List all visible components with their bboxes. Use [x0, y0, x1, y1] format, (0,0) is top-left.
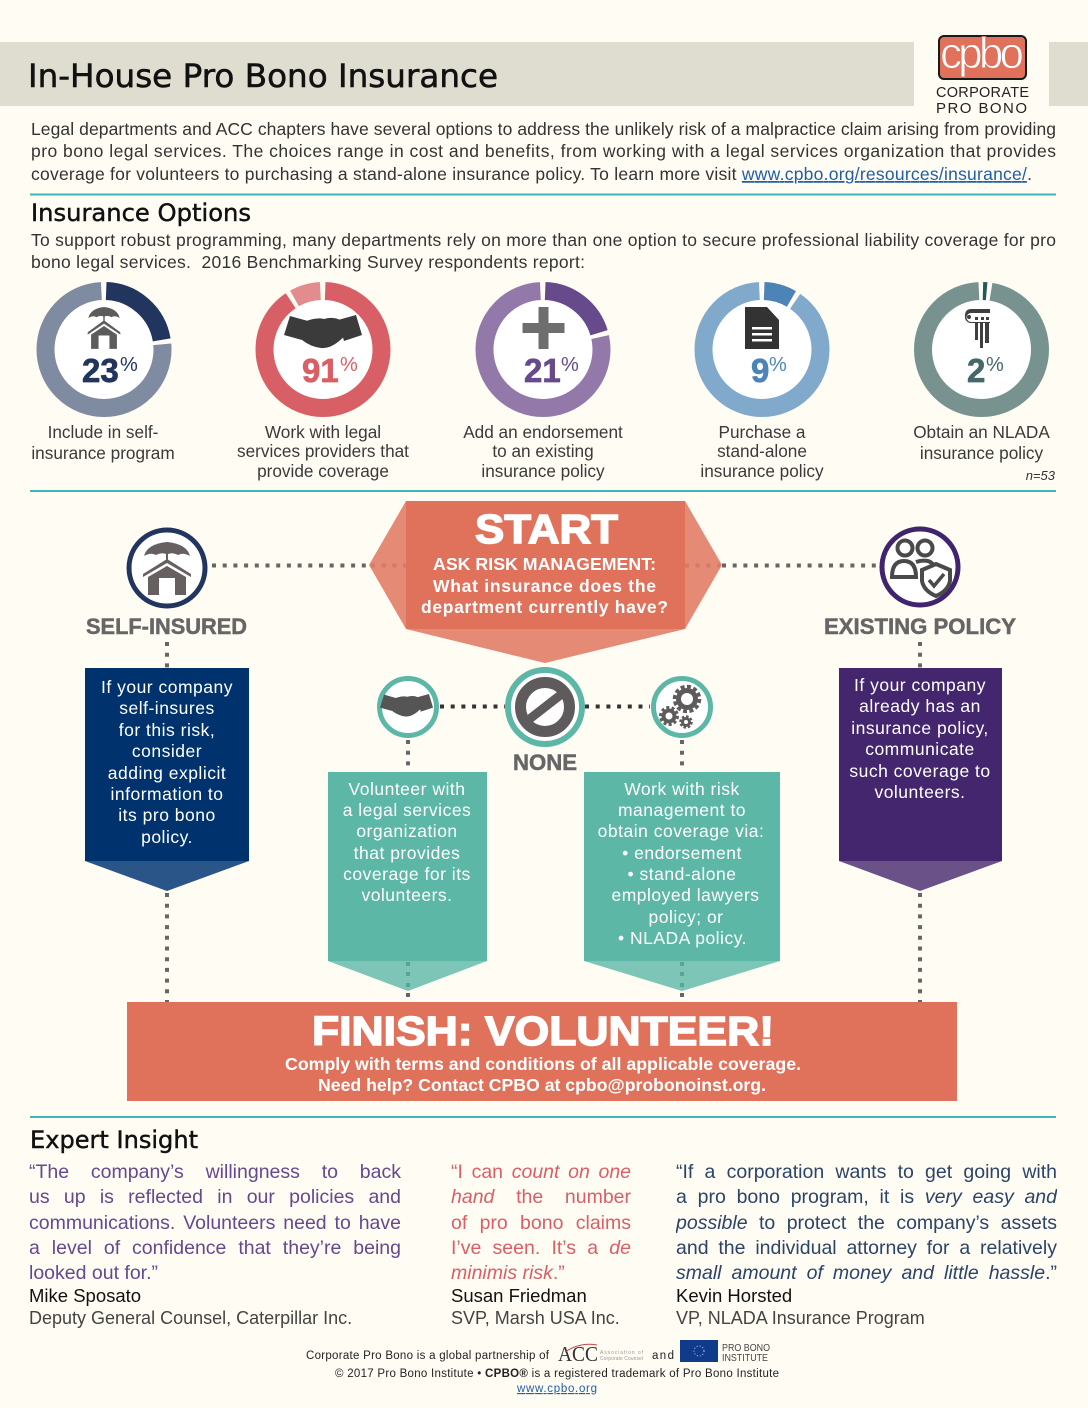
logo: ACC: ACC: [558, 1342, 598, 1366]
attribution: Mike Sposato: [29, 1285, 352, 1328]
heading: Insurance Options: Insurance Options: [31, 199, 251, 227]
attribution: Kevin Horsted: [676, 1285, 925, 1328]
panel: self-insured advice: self-insures: [119, 698, 215, 718]
donut: 23% self-insurance: [31, 291, 175, 463]
quote: Susan Friedman: of pro bono claims: [451, 1212, 631, 1234]
logo: Pro Bono Institute: PRO BONO: [722, 1343, 770, 1354]
title: In-House Pro Bono Insurance: [28, 57, 498, 95]
self-insured node: SELF-INSURED: [86, 614, 247, 639]
quote: Kevin Horsted: possible to protect the company’s assets: [676, 1212, 1057, 1234]
donut: 2% NLADA policy: insurance policy: [920, 443, 1044, 463]
footer: © 2017 Pro Bono Institute • CPBO® is a registered trademark of Pro Bono Institute: [335, 1368, 779, 1380]
quote: Susan Friedman: hand the number: [451, 1186, 631, 1208]
donut: 91% legal services providers: services providers that: [237, 441, 409, 461]
header band: [0, 42, 1088, 106]
quote: Susan Friedman: minimis risk.”: [451, 1262, 565, 1284]
intro paragraph: Legal departments and ACC chapters have several options to address the unlikely risk of a malpractice claim arising from providing: [31, 119, 1056, 139]
panel: existing policy advice: volunteers.: [874, 782, 966, 802]
panel: volunteer with legal services organization: [328, 772, 487, 997]
logo: Pro Bono Institute: INSTITUTE: [722, 1353, 768, 1364]
logo: Corporate Pro Bono: PRO BONO: [936, 100, 1027, 117]
donut: 9% stand-alone policy: %: [769, 354, 787, 376]
attribution: Susan Friedman: [451, 1285, 620, 1328]
panel: volunteer with legal services organization: a legal services: [343, 800, 471, 820]
donut: 9% stand-alone policy: 9: [751, 352, 769, 389]
quote: Kevin Horsted: “If a corporation wants to get going with: [676, 1161, 1057, 1183]
quote: Mike Sposato: “The company’s willingness to back: [29, 1161, 401, 1183]
donut: 9% stand-alone policy: stand-alone: [717, 441, 807, 461]
panel: volunteer with legal services organization: coverage for its: [343, 864, 471, 884]
quote: Kevin Horsted: a pro bono program, it is very easy and: [676, 1186, 1057, 1208]
panel: existing policy advice: [839, 668, 1002, 891]
donut: 21% endorsement: Add an endorsement: [463, 422, 623, 442]
attribution: Susan Friedman: Susan Friedman: [451, 1285, 587, 1306]
donut: 23% self-insurance: 23: [82, 352, 119, 389]
panel: self-insured advice: information to: [110, 784, 224, 804]
sample size note: n=53: [1026, 468, 1056, 483]
logo: Corporate Pro Bono: CORPORATE: [936, 85, 1029, 101]
panel: work with risk management: [584, 772, 780, 997]
icon: gears node: [654, 678, 710, 736]
panel: existing policy advice: such coverage to: [849, 761, 991, 781]
donut: 21% endorsement: [463, 291, 623, 481]
quote: Mike Sposato: a level of confidence that they’re being: [29, 1237, 401, 1259]
start banner: What insurance does the: [433, 576, 656, 596]
panel: work with risk management: management to: [618, 800, 746, 820]
self-insured node: [86, 530, 247, 639]
logo: Corporate Pro Bono: cpbo: [940, 29, 1024, 78]
donut: 91% legal services providers: %: [340, 354, 358, 376]
quote: Kevin Horsted: small amount of money and little hassle.”: [676, 1262, 1057, 1284]
existing policy node: [824, 529, 1016, 639]
attribution: Kevin Horsted: Kevin Horsted: [676, 1285, 792, 1306]
insurance options intro text: bono legal services. 2016 Benchmarking Survey respondents report:: [31, 252, 585, 272]
donut: 2% NLADA policy: Obtain an NLADA: [913, 422, 1050, 442]
panel: volunteer with legal services organization: Volunteer with: [349, 779, 465, 799]
intro paragraph: pro bono legal services. The choices range in cost and benefits, from working with a legal services organization that provides: [31, 141, 1056, 161]
quote: Mike Sposato: looked out for.”: [29, 1262, 158, 1284]
panel: existing policy advice: insurance policy,: [851, 718, 989, 738]
donut: 21% endorsement: 21: [524, 352, 561, 389]
panel: self-insured advice: its pro bono: [118, 805, 216, 825]
logo: Pro Bono Institute: [680, 1340, 770, 1364]
start banner: ASK RISK MANAGEMENT:: [433, 554, 656, 574]
donut: 91% legal services providers: [237, 291, 409, 481]
panel: existing policy advice: If your company: [854, 675, 986, 695]
panel: work with risk management: obtain coverage via:: [598, 821, 764, 841]
attribution: Mike Sposato: Mike Sposato: [29, 1285, 141, 1306]
quote: Susan Friedman: “I can count on one: [451, 1161, 631, 1183]
quote: Susan Friedman: I’ve seen. It’s a de: [451, 1237, 631, 1259]
panel: self-insured advice: policy.: [141, 827, 193, 847]
insurance options intro text: To support robust programming, many departments rely on more than one option to secure professional liability coverage for pro: [31, 230, 1056, 250]
footer: [306, 1350, 779, 1395]
footer: www.cpbo.org: [516, 1383, 597, 1395]
donut: 2% NLADA policy: [913, 291, 1050, 463]
finish banner: Need help? Contact CPBO at cpbo@probonoinst.org.: [318, 1075, 766, 1095]
icon: handshake node: [380, 678, 436, 736]
donut: 21% endorsement: insurance policy: [481, 461, 605, 481]
attribution: Mike Sposato: Deputy General Counsel, Caterpillar Inc.: [29, 1308, 352, 1328]
panel: existing policy advice: already has an: [859, 696, 981, 716]
start banner: START: [475, 506, 618, 552]
donut: 2% NLADA policy: 2: [967, 352, 985, 389]
panel: work with risk management: employed lawyers: [611, 885, 760, 905]
donut: 23% self-insurance: Include in self-: [48, 422, 158, 442]
attribution: Kevin Horsted: VP, NLADA Insurance Program: [676, 1308, 925, 1328]
quote: Susan Friedman: [451, 1161, 631, 1284]
quote: Mike Sposato: [29, 1161, 401, 1284]
quote: Kevin Horsted: [676, 1161, 1057, 1284]
donut: 91% legal services providers: provide coverage: [257, 461, 389, 481]
panel: volunteer with legal services organization: that provides: [354, 843, 460, 863]
panel: self-insured advice: [85, 668, 249, 891]
donut: 2% NLADA policy: %: [986, 354, 1004, 376]
logo: Corporate Pro Bono: [936, 29, 1029, 117]
start banner: department currently have?: [421, 597, 668, 617]
donut: 23% self-insurance: insurance program: [31, 443, 175, 463]
attribution: Susan Friedman: SVP, Marsh USA Inc.: [451, 1308, 620, 1328]
heading: Expert Insight: Expert Insight: [30, 1126, 198, 1154]
donut: 21% endorsement: to an existing: [492, 441, 594, 461]
quote: Kevin Horsted: and the individual attorney for a relatively: [676, 1237, 1057, 1259]
panel: volunteer with legal services organization: organization: [356, 821, 458, 841]
donut: 9% stand-alone policy: insurance policy: [700, 461, 824, 481]
panel: work with risk management: • stand-alone: [628, 864, 736, 884]
insurance options intro text: [31, 230, 1056, 272]
start banner: [369, 501, 722, 663]
logo: ACC: Association of: [600, 1350, 644, 1356]
logo: ACC: Corporate Counsel: [600, 1356, 643, 1362]
logo: ACC: [558, 1342, 644, 1366]
donut: 21% endorsement: %: [561, 354, 579, 376]
donut: 9% stand-alone policy: [700, 291, 824, 481]
donut: 91% legal services providers: 91: [302, 352, 339, 389]
footer: Corporate Pro Bono is a global partnership of: [306, 1350, 550, 1362]
donut: 23% self-insurance: %: [120, 354, 138, 376]
finish banner: Comply with terms and conditions of all applicable coverage.: [285, 1054, 801, 1074]
panel: work with risk management: policy; or: [648, 907, 724, 927]
panel: existing policy advice: communicate: [865, 739, 975, 759]
finish banner: FINISH: VOLUNTEER!: [312, 1008, 774, 1054]
intro paragraph: coverage for volunteers to purchasing a stand-alone insurance policy. To learn more visit www.cpbo.org/resources/insurance/.: [31, 164, 1032, 184]
existing policy node: EXISTING POLICY: [824, 614, 1016, 639]
panel: work with risk management: • NLADA policy.: [618, 928, 747, 948]
quote: Mike Sposato: us up is reflected in our policies and: [29, 1186, 401, 1208]
panel: work with risk management: • endorsement: [622, 843, 742, 863]
panel: self-insured advice: consider: [132, 741, 202, 761]
footer: and: [652, 1350, 674, 1362]
finish banner: [127, 1002, 957, 1101]
panel: volunteer with legal services organization: volunteers.: [361, 885, 453, 905]
quote: Mike Sposato: communications. Volunteers need to have: [29, 1212, 401, 1234]
panel: work with risk management: Work with risk: [624, 779, 740, 799]
donut: 9% stand-alone policy: Purchase a: [719, 422, 806, 442]
connectors: dotted flow lines: [167, 566, 920, 1002]
donut: 91% legal services providers: Work with legal: [265, 422, 381, 442]
panel: self-insured advice: for this risk,: [119, 720, 215, 740]
none node: [508, 670, 582, 775]
intro paragraph: [31, 119, 1056, 184]
panel: self-insured advice: adding explicit: [108, 763, 226, 783]
none node: NONE: [513, 750, 577, 775]
panel: self-insured advice: If your company: [101, 677, 233, 697]
